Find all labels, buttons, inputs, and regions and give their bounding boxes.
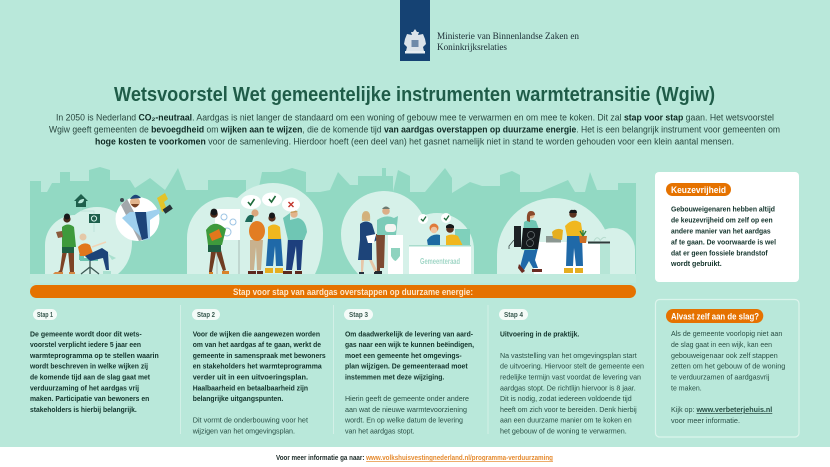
step 3 label: Stap 3 — [349, 310, 368, 319]
intro paragraph: hoge kosten te voorkomen voor de samenleving. Hierdoor hoeft (een deel van) het gasnet namelijk niet in stand te worden gehouden voor een klein aantal mensen. — [95, 136, 734, 148]
step 1 text: voorstel verplicht iedere 5 jaar een — [30, 340, 141, 349]
items on counter — [546, 229, 563, 242]
step 2 text: belangrijke uitgangspunten. — [193, 394, 283, 403]
step 2 text: verder uit in een uitvoeringsplan. — [193, 372, 308, 382]
step 3 text: Hierin geeft de gemeente onder andere — [345, 394, 469, 403]
panel text: freedom of choice: Gebouweigenaren hebben altijd — [671, 205, 775, 214]
step 2 text: Dit vormt de onderbouwing voor het — [193, 416, 308, 425]
panel text: get started yourself: de slag gaat in een wijk, kan een — [671, 340, 772, 349]
step 2 text: Voor de wijken die aangewezen worden — [193, 329, 320, 338]
installer in circle with drill — [116, 193, 173, 241]
step 1 text: De gemeente wordt door dit wets- — [30, 329, 142, 338]
step 2 column — [192, 309, 326, 436]
panel text: get started yourself: gebouweigenaar ook zelf stappen — [671, 351, 778, 360]
step 4 text: Uitvoering in de praktijk. — [500, 329, 579, 338]
ministry name — [437, 31, 579, 52]
step bar: Stap voor stap van aardgas overstappen op duurzame energie: — [233, 287, 473, 297]
panel text: get started yourself: voor meer informatie. — [671, 416, 740, 425]
speaker at podium — [375, 206, 398, 274]
step 3 text: instemmen met deze wijziging. — [345, 372, 444, 382]
icon: drill — [157, 193, 173, 214]
panel text: get started yourself: te maken. — [671, 384, 702, 393]
intro paragraph: Wgiw geeft gemeenten de bevoegdheid om wijken aan te wijzen, die de komende tijd van aardgas overstappen op duurzame energie. Het is een belangrijk instrument voor gemeenten om — [49, 124, 780, 136]
seated resident with chair — [78, 234, 116, 274]
panel text: freedom of choice: andere manier van het aardgas — [671, 227, 771, 236]
speaker in navy coat — [358, 211, 379, 274]
person carrying induction hob — [509, 211, 542, 273]
podium with shield — [388, 235, 403, 274]
council members — [418, 213, 470, 246]
step 1 text: verduurzaming of het aardgas vrij — [30, 383, 139, 392]
clouds — [45, 183, 635, 274]
scene 1: resident and installer — [53, 193, 173, 274]
step bar — [30, 285, 636, 298]
ministry name: Ministerie van Binnenlandse Zaken en — [437, 31, 579, 41]
step 4 column — [499, 309, 644, 436]
icon: heat meter — [89, 214, 100, 223]
neighbour in yellow — [265, 212, 283, 273]
step 3 text: moet een gemeente het omgevings- — [345, 351, 462, 360]
step 4 text: aan een duurzame manier om te koken en — [500, 416, 632, 425]
step 4 text: aardgas stopt. De richtlijn hiervoor is 8 jaar. — [500, 383, 636, 392]
step 1 text: maken. Participatie van bewoners en — [30, 394, 150, 403]
step 4 label: Stap 4 — [504, 310, 523, 319]
title: Wetsvoorstel Wet gemeentelijke instrumenten warmtetransitie (Wgiw) — [114, 83, 715, 106]
panel heading: Keuzevrijheid: Keuzevrijheid — [671, 185, 726, 195]
step 3 text: van het aardgas stopt. — [345, 426, 414, 436]
neighbour with teal shirt — [283, 210, 307, 274]
panel heading: Keuzevrijheid — [666, 183, 731, 196]
panel heading: Alvast zelf aan de slag: Alvast zelf aan de slag? — [671, 311, 759, 321]
panel: Alvast zelf aan de slag — [656, 300, 799, 437]
panel text: freedom of choice: af te gaan. De voorwaarde is wel — [671, 237, 776, 246]
step 1 text: warmteprogramma op te stellen waarin — [29, 351, 159, 360]
step 4 text: het gebouw of de woning te verwarmen. — [500, 426, 627, 436]
logo ribbon with crest — [400, 0, 430, 61]
presenter — [206, 209, 229, 274]
step 3 column — [344, 309, 474, 436]
step 4 text: heeft om zich voor te bereiden. Denk hierbij — [500, 405, 637, 414]
panel text: get started yourself — [671, 329, 785, 425]
step 4 text: de uitvoering. Hiervoor stelt de gemeente een — [500, 362, 644, 371]
thought bubbles: opinions — [241, 192, 300, 212]
panel text: get started yourself: zetten om het gebouw of de woning — [671, 362, 785, 371]
step 3 text — [344, 329, 474, 436]
step 3 text: plan wijzigen. De gemeenteraad moet — [345, 362, 468, 371]
step 1 label: Stap 1 — [37, 310, 53, 319]
icon: green home — [74, 194, 88, 207]
step 4 text: Dit is nodig, zodat iedereen voldoende tijd — [500, 394, 632, 403]
neighbour with child — [245, 209, 265, 274]
logo: Rijksoverheid ministry — [400, 0, 579, 61]
ministry name: Koninkrijksrelaties — [437, 42, 507, 52]
step 4 text: redelijke termijn vast voordat de levering van — [500, 372, 641, 382]
step 3 text: aan wat de nieuwe warmtevoorziening — [345, 405, 467, 414]
step 1 text: de komende tijd aan de slag gaat met — [30, 372, 150, 382]
dividers — [180, 305, 488, 434]
step 1 text — [29, 329, 159, 414]
step 2 text: Haalbaarheid en betaalbaarheid zijn — [193, 383, 308, 392]
panel text: get started yourself: Als de gemeente voorlopig niet aan — [671, 329, 782, 338]
intro paragraph: In 2050 is Nederland CO₂-neutraal. Aardgas is niet langer de standaard om een woning of gebouw mee te verwarmen en om mee te koken. Dit zal stap voor stap gaan. Het wetsvoorstel — [56, 112, 774, 124]
step 2 text: en stakeholders het warmteprogramma — [193, 362, 323, 371]
step 2 text — [192, 329, 326, 436]
scene 4: household switching to induction — [509, 210, 610, 274]
panel text: freedom of choice: wordt gebruikt. — [670, 259, 722, 268]
panel text: get started yourself: te verduurzamen of aardgasvrij — [671, 373, 770, 382]
council desk: Gemeenteraad — [420, 257, 460, 266]
step 1 text: stakeholders is hierbij belangrijk. — [30, 405, 137, 414]
illustration: city skyline with people — [30, 167, 636, 283]
step 4 text — [500, 329, 644, 436]
intro paragraph — [49, 112, 780, 148]
whiteboard — [215, 209, 240, 274]
panel text: freedom of choice: dat er geen fossiele brandstof — [671, 248, 768, 257]
step 1 text: wordt beschreven in welke wijken zij — [29, 362, 148, 371]
footer link text: Voor meer informatie ga naar: www.volkshuisvestingnederland.nl/programma-verduurzaming — [276, 455, 553, 462]
step 2 text: gemeente in samenspraak met bewoners — [193, 351, 326, 360]
step 4 text: Na vaststelling van het omgevingsplan start — [500, 351, 637, 360]
scene 2: presentation with neighbours — [206, 192, 307, 274]
lower band — [30, 274, 636, 283]
scene 3: municipal council — [358, 206, 471, 274]
panel heading: Alvast zelf aan de slag — [666, 309, 763, 323]
step 3 text: wordt. En op welke datum de levering — [344, 416, 463, 425]
step 2 text: wijzigen van het omgevingsplan. — [192, 426, 295, 436]
step 2 text: om van het aardgas af te gaan, werkt de — [193, 340, 321, 349]
kitchen block — [534, 237, 610, 274]
step 1 column — [29, 309, 159, 414]
skyline silhouette — [30, 167, 636, 274]
step 3 text: gas naar een wijk te kunnen beëindigen, — [345, 340, 474, 349]
footer — [0, 447, 830, 467]
step 4 label — [499, 309, 528, 320]
panel: Keuzevrijheid — [655, 172, 799, 282]
person in yellow with plant — [564, 210, 587, 273]
panel text: freedom of choice: de keuzevrijheid om zelf op een — [671, 216, 773, 225]
standing resident — [53, 214, 76, 274]
panel text: get started yourself: Kijk op: www.verbeterjehuis.nl — [671, 405, 772, 414]
step 2 label: Stap 2 — [197, 310, 215, 319]
panel text: freedom of choice — [670, 205, 776, 268]
step 3 text: Om daadwerkelijk de levering van aard- — [345, 329, 473, 338]
